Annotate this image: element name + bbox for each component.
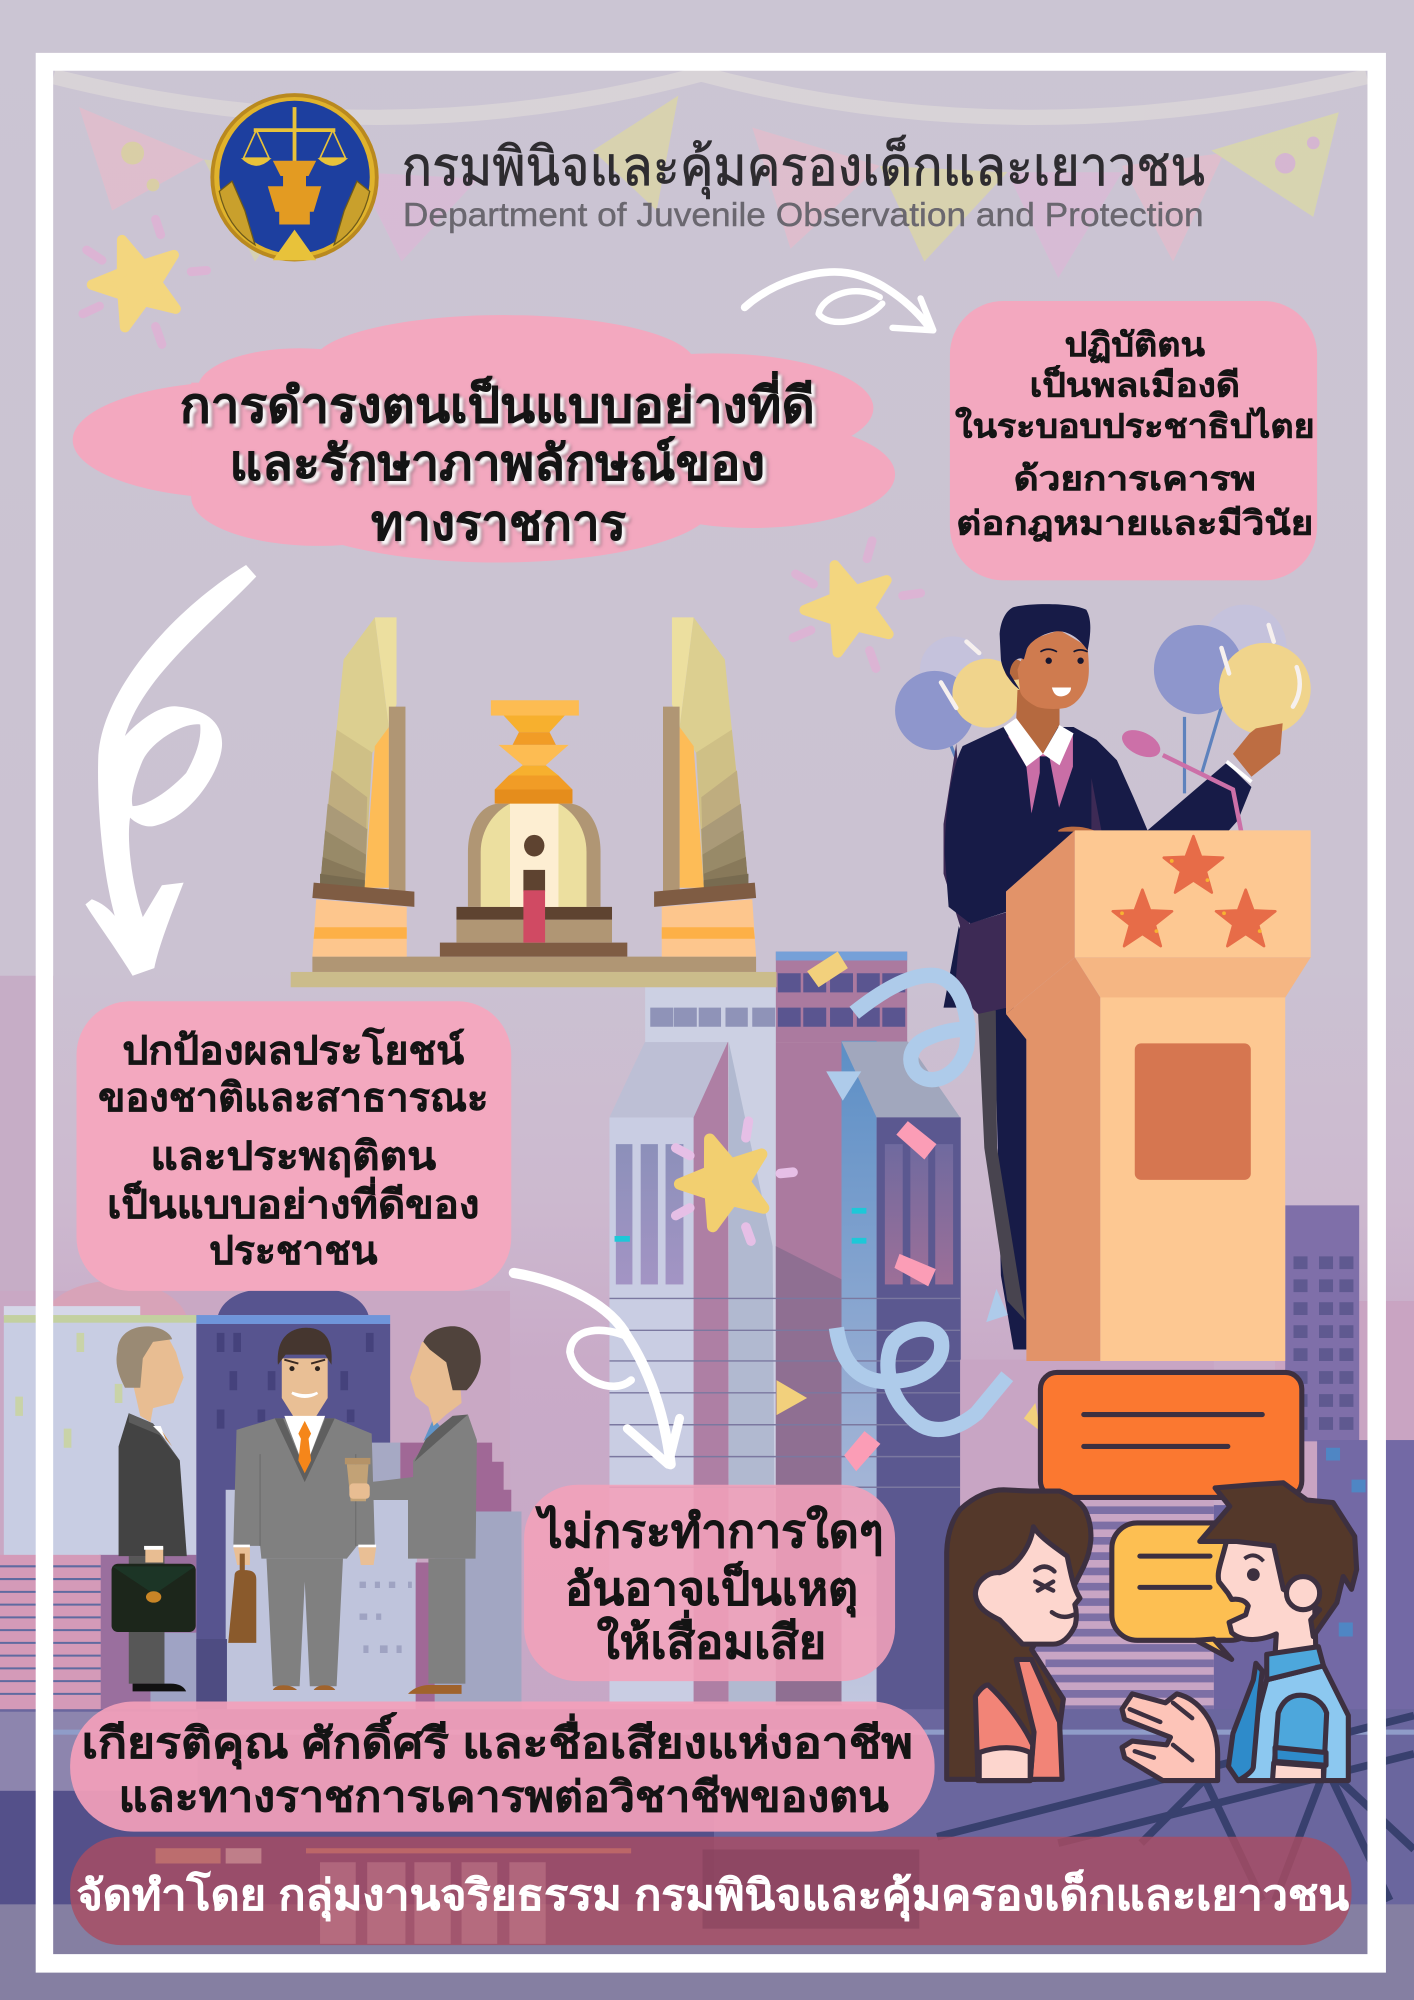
- right wing: [654, 617, 756, 957]
- pink box lower: อันอาจเป็นเหตุ: [565, 1561, 858, 1618]
- left pink box: ของชาติและสาธารณะ: [98, 1076, 488, 1120]
- right pink box: ปฏิบัติตน: [1065, 327, 1205, 364]
- hand: [1233, 723, 1283, 777]
- city skyline: [0, 952, 1414, 2000]
- hair: [1000, 604, 1090, 690]
- left pink box: ปกป้องผลประโยชน์: [122, 1027, 465, 1073]
- balloons: [895, 605, 1311, 793]
- right pink box: [950, 301, 1317, 580]
- hands: [1122, 1694, 1218, 1781]
- neck and face: [1016, 690, 1060, 754]
- star right: [793, 541, 921, 668]
- heading text: ทางราชการ: [371, 497, 626, 551]
- bar text: จัดทำโดย กลุ่มงานจริยธรรม กรมพินิจและคุ้มครองเด็กและเยาวชน: [77, 1869, 1349, 1921]
- conversation illustration: [947, 1372, 1357, 1781]
- pink box lower: ให้เสื่อมเสีย: [597, 1610, 826, 1668]
- credit bar: [70, 1837, 1352, 1945]
- bar background: [70, 1837, 1352, 1945]
- monument: [291, 617, 776, 987]
- logo emblem: [210, 93, 379, 261]
- department name thai: กรมพินิจและคุ้มครองเด็กและเยาวชน: [402, 135, 1205, 199]
- arrow to right box: [745, 272, 933, 330]
- legs: [944, 926, 1026, 1349]
- collar: [1003, 718, 1074, 767]
- left pink box: และประพฤติตน: [150, 1135, 436, 1179]
- pink box lower: [524, 1485, 895, 1681]
- heading text: และรักษาภาพลักษณ์ของ: [230, 436, 765, 491]
- cloud heading: [73, 315, 895, 562]
- star top left: [81, 219, 207, 344]
- man right: [345, 1326, 481, 1694]
- jacket: [945, 727, 1251, 923]
- wide pink box: และทางราชการเคารพต่อวิชาชีพของตน: [119, 1773, 889, 1820]
- shirt and tie: [1008, 733, 1073, 814]
- right pink box: ต่อกฎหมายและมีวินัย: [956, 504, 1313, 542]
- star center: [669, 1121, 793, 1241]
- right pink box: ด้วยการเคารพ: [1014, 461, 1256, 498]
- wide pink box: [70, 1702, 935, 1832]
- bunting: [54, 74, 1367, 278]
- left wing: [312, 617, 414, 957]
- cloud shape: [73, 315, 895, 562]
- left pink box: ประชาชน: [209, 1229, 377, 1273]
- microphone: [1163, 755, 1241, 832]
- heading text: [180, 371, 815, 551]
- man center: [228, 1328, 376, 1690]
- right pink box: เป็นพลเมืองดี: [1030, 365, 1240, 405]
- department name: [402, 135, 1205, 234]
- department name english: Department of Juvenile Observation and Protection: [403, 197, 1204, 234]
- heading text: การดำรงตนเป็นแบบอย่างที่ดี: [180, 371, 815, 433]
- arrow to lower box: [514, 1273, 680, 1464]
- confetti: [615, 952, 1040, 1471]
- orange speech bubble: [1040, 1372, 1302, 1497]
- man: [1200, 1483, 1357, 1781]
- speaker: [944, 604, 1283, 1349]
- left pink box: เป็นแบบอย่างที่ดีของ: [107, 1176, 479, 1227]
- right pink box: ในระบอบประชาธิปไตย: [955, 406, 1315, 446]
- man left: [112, 1326, 196, 1691]
- businessmen: [112, 1326, 481, 1694]
- pink box lower: ไม่กระทำการใดๆ: [534, 1504, 884, 1557]
- yellow speech bubble: [1112, 1523, 1256, 1659]
- woman: [947, 1490, 1091, 1781]
- bar inner building shapes: [156, 1848, 919, 1944]
- wide pink box: เกียรติคุณ ศักดิ์ศรี และชื่อเสียงแห่งอาชีพ: [82, 1712, 913, 1770]
- podium: [1006, 830, 1311, 1361]
- left pink box: [77, 1001, 511, 1291]
- podium hand: [1058, 827, 1097, 832]
- big white arrow: [85, 565, 256, 976]
